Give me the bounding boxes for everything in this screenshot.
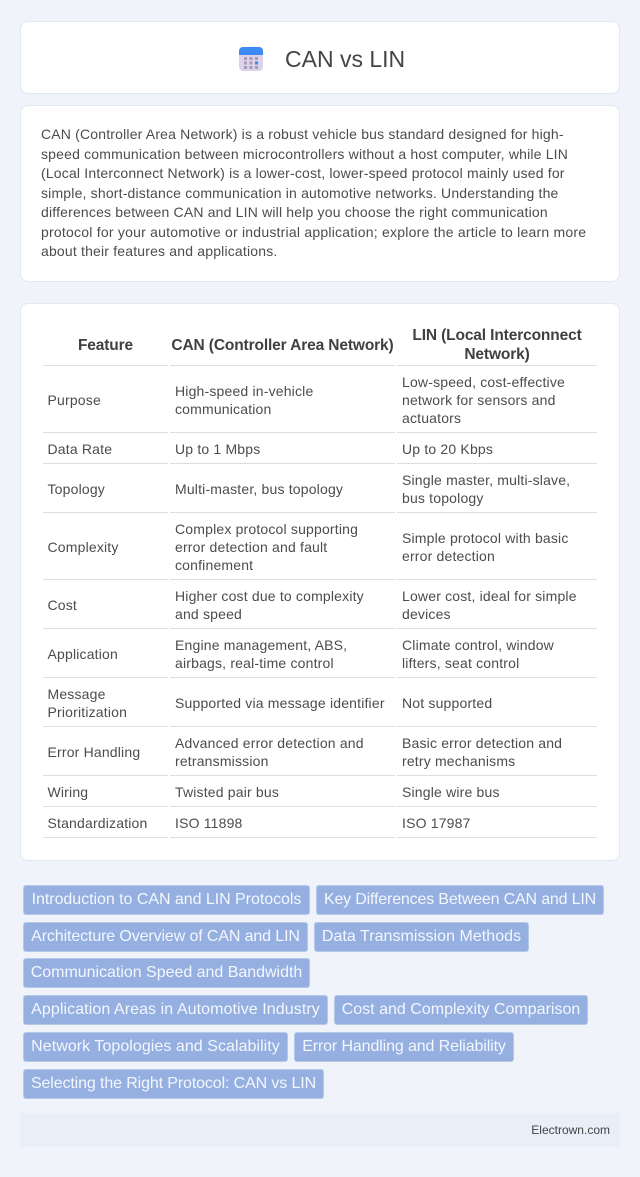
- row: Purpose: Purpose: [48, 392, 101, 408]
- tag: [316, 885, 604, 915]
- tag: Application Areas in Automotive Industry: [31, 1001, 320, 1018]
- row: Message Prioritization: Prioritization: [48, 704, 127, 720]
- footer credit: Electrown.com: [531, 1123, 610, 1137]
- row: Complexity: Simple protocol with basic: [402, 530, 569, 546]
- row: Wiring: Twisted pair bus: [175, 784, 279, 800]
- row: Topology: Multi-master, bus topology: [175, 481, 343, 497]
- tag: [294, 1032, 514, 1062]
- row: Purpose: communication: [175, 401, 272, 417]
- tag: Architecture Overview of CAN and LIN: [31, 928, 300, 945]
- row: Error Handling: retry mechanisms: [402, 753, 515, 769]
- tag: Network Topologies and Scalability: [31, 1038, 280, 1055]
- row: Application: airbags, real-time control: [175, 655, 334, 671]
- row: Complexity: confinement: [175, 557, 253, 573]
- row: Wiring: Wiring: [48, 784, 88, 800]
- header card: [20, 21, 620, 94]
- topic tags: [23, 885, 604, 1099]
- tag: [334, 995, 588, 1025]
- intro text: protocol for your automotive or industrial application; explore the article to learn more: [41, 224, 586, 240]
- row: Purpose: [48, 374, 565, 426]
- intro text: speed communication between microcontrollers without a host computer, while LIN: [41, 146, 568, 162]
- tag: [23, 885, 310, 915]
- row: Wiring: Single wire bus: [402, 784, 500, 800]
- footer: [20, 1113, 620, 1147]
- row: Purpose: network for sensors and: [402, 392, 556, 408]
- tag: Communication Speed and Bandwidth: [31, 964, 302, 981]
- tag: Introduction to CAN and LIN Protocols: [32, 891, 301, 908]
- tag: Cost and Complexity Comparison: [342, 1001, 580, 1018]
- row: Standardization: ISO 17987: [402, 815, 471, 831]
- table header: [78, 327, 582, 363]
- row: Standardization: Standardization: [48, 815, 148, 831]
- row: Cost: devices: [402, 606, 451, 622]
- table header: Network): [464, 346, 530, 363]
- row: Error Handling: Basic error detection and: [402, 735, 562, 751]
- row: Error Handling: Error Handling: [48, 744, 140, 760]
- row: Cost: Cost: [48, 597, 77, 613]
- row: Message Prioritization: [48, 686, 492, 720]
- row: Standardization: [48, 815, 471, 831]
- row: Cost: and speed: [175, 606, 242, 622]
- row: Topology: bus topology: [402, 490, 484, 506]
- row: Topology: [48, 472, 570, 506]
- comparison table: [43, 327, 597, 838]
- row: Cost: [48, 588, 577, 622]
- row: Data Rate: [48, 441, 493, 457]
- row: Purpose: Low-speed, cost-effective: [402, 374, 565, 390]
- row: Application: Engine management, ABS,: [175, 637, 347, 653]
- tag: [23, 1069, 324, 1099]
- row: Purpose: High-speed in-vehicle: [175, 383, 313, 399]
- row: Data Rate: Up to 20 Kbps: [402, 441, 493, 457]
- row: Cost: Higher cost due to complexity: [175, 588, 364, 604]
- intro text: about their features and applications.: [41, 243, 277, 259]
- tag: [23, 1032, 288, 1062]
- row: Error Handling: Advanced error detection and: [175, 735, 364, 751]
- tag: Selecting the Right Protocol: CAN vs LIN: [31, 1075, 316, 1092]
- tag: Key Differences Between CAN and LIN: [324, 891, 596, 908]
- row: Standardization: ISO 11898: [175, 815, 243, 831]
- row: Complexity: error detection and fault: [175, 539, 327, 555]
- row: Application: Climate control, window: [402, 637, 554, 653]
- row: Complexity: Complex protocol supporting: [175, 521, 358, 537]
- row: Complexity: error detection: [402, 548, 495, 564]
- row: Data Rate: Up to 1 Mbps: [175, 441, 260, 457]
- row: Application: lifters, seat control: [402, 655, 519, 671]
- intro text: differences between CAN and LIN will help you choose the right communication: [41, 204, 548, 220]
- row: Complexity: Complexity: [48, 539, 119, 555]
- tag: Error Handling and Reliability: [302, 1038, 506, 1055]
- tag: Data Transmission Methods: [322, 928, 521, 945]
- row: Error Handling: [48, 735, 562, 769]
- row: Application: Application: [48, 646, 118, 662]
- row: Wiring: [48, 784, 500, 800]
- intro text: [41, 126, 586, 259]
- row: Application: [48, 637, 554, 671]
- row: Complexity: [48, 521, 569, 573]
- row: Message Prioritization: Message: [48, 686, 106, 702]
- intro text: simple, short-distance communication in automotive networks. Understanding the: [41, 184, 559, 200]
- icon: calendar: [239, 47, 263, 71]
- tag: [23, 922, 308, 952]
- row: Topology: Topology: [48, 481, 105, 497]
- row: Message Prioritization: Supported via message identifier: [175, 695, 385, 711]
- title: CAN vs LIN: [285, 46, 405, 72]
- table header: CAN (Controller Area Network): [171, 337, 394, 354]
- intro text: (Local Interconnect Network) is a lower-cost, lower-speed protocol mainly used for: [41, 165, 565, 181]
- tag: [23, 995, 328, 1025]
- tag: [23, 958, 310, 988]
- table header: Feature: [78, 337, 133, 354]
- row: Topology: Single master, multi-slave,: [402, 472, 570, 488]
- row: Data Rate: Data Rate: [48, 441, 112, 457]
- table header: LIN (Local Interconnect: [412, 327, 582, 344]
- row: Error Handling: retransmission: [175, 753, 269, 769]
- tag: [314, 922, 529, 952]
- panel: introduction: [20, 105, 620, 282]
- row: Message Prioritization: Not supported: [402, 695, 492, 711]
- row: Purpose: actuators: [402, 410, 461, 426]
- intro text: CAN (Controller Area Network) is a robust vehicle bus standard designed for high-: [41, 126, 564, 142]
- row: Cost: Lower cost, ideal for simple: [402, 588, 577, 604]
- panel: comparison table: [20, 303, 620, 861]
